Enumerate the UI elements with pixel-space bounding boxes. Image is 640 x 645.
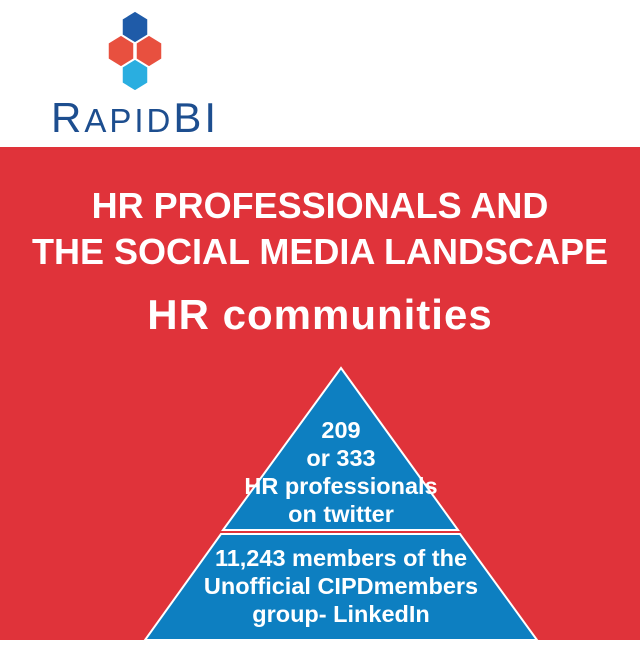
icon: cubes — [108, 11, 162, 91]
title: THE SOCIAL MEDIA LANDSCAPE — [32, 231, 608, 272]
subtitle: HR communities — [147, 291, 493, 338]
pyramid: on twitter — [288, 501, 394, 527]
logo: RAPIDBI — [51, 94, 219, 140]
title — [32, 185, 608, 272]
title: HR PROFESSIONALS AND — [92, 185, 548, 226]
logo — [51, 12, 219, 140]
pyramid: 209 — [321, 417, 361, 443]
red panel — [0, 147, 640, 640]
pyramid — [144, 366, 538, 640]
pyramid: group- LinkedIn — [252, 601, 430, 627]
pyramid: or 333 — [306, 445, 376, 471]
pyramid: 11,243 members of the — [215, 545, 467, 571]
pyramid: Unofficial CIPDmembers — [204, 573, 478, 599]
pyramid: HR professionals — [244, 473, 438, 499]
